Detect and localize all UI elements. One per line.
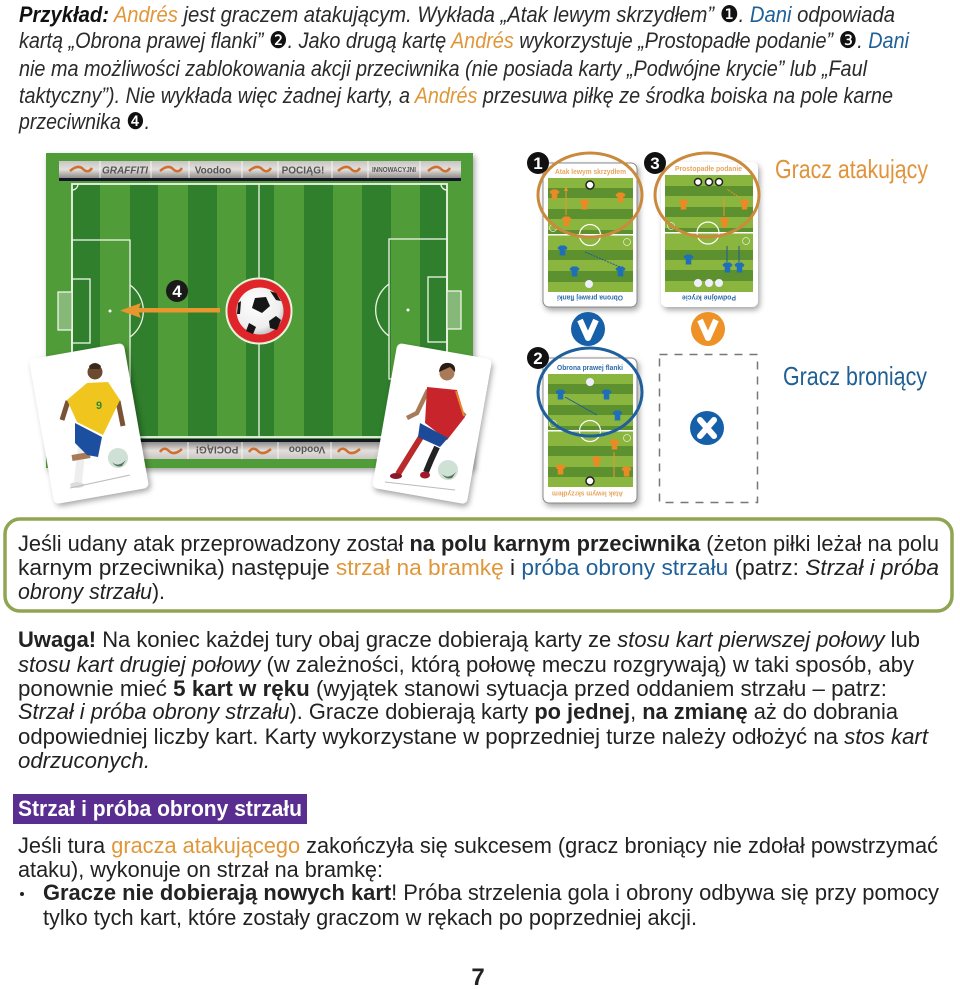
football pitch board bbox=[46, 153, 473, 468]
text block: shot rules: ataku), wykonuje on strzał na bramkę: bbox=[18, 857, 383, 882]
advertising board: top bbox=[59, 161, 461, 181]
callout: penalty area attack bbox=[5, 519, 952, 611]
ball token bbox=[226, 278, 292, 344]
icon: blue cross bbox=[690, 411, 724, 445]
text block: note: stosu kart drugiej połowy (w zależności, którą połowę meczu rozgrywają) w taki sposób, aby bbox=[18, 652, 914, 677]
text block: shot rules bbox=[18, 833, 939, 930]
advertising board: bottom: POCIĄG! bbox=[196, 444, 238, 454]
text block: note: Strzał i próba obrony strzału). Gracze dobierają karty po jednej, na zmianę aż do dobrania bbox=[18, 699, 899, 724]
text block: shot rules: tylko tych kart, które zostały graczom w rękach po poprzedniej akcji. bbox=[43, 905, 697, 930]
card 3: through pass: Podwójne krycie bbox=[682, 294, 736, 302]
text block: note bbox=[18, 627, 929, 773]
heading: shot and save attempt: Strzał i próba obrony strzału bbox=[18, 796, 302, 821]
badge: 4: 4 bbox=[172, 282, 182, 301]
player card: Andrés bbox=[29, 343, 149, 504]
highlight ring: card 1 bbox=[538, 153, 642, 237]
text block: example intro: przeciwnika ❹. bbox=[18, 109, 150, 135]
text block: example intro: Przykład: Andrés jest graczem atakującym. Wykłada „Atak lewym skrzydłem” ❶. Dani odpowiada bbox=[19, 2, 895, 28]
card 3: through pass bbox=[661, 162, 758, 307]
label: attacking player: Gracz atakujący bbox=[775, 154, 928, 184]
callout: penalty area attack: Jeśli udany atak przeprowadzony został na polu karnym przeciwnika (żeton piłki leżał na polu bbox=[18, 531, 939, 556]
text block: note: odpowiedniej liczby kart. Karty wykorzystane w poprzedniej turze należy odłożyć na stos kart bbox=[18, 724, 929, 749]
card 2: defence bbox=[543, 358, 637, 503]
badge: 2 bbox=[527, 347, 549, 369]
highlight ring: card 3 bbox=[655, 153, 759, 237]
badge: 3 bbox=[644, 152, 666, 174]
text block: note: ponownie mieć 5 kart w ręku (wyjątek stanowi sytuacja przed oddaniem strzału – patrz: bbox=[18, 676, 887, 701]
card 1: attack: Obrona prawej flanki bbox=[557, 294, 623, 302]
text block: example intro: nie ma możliwości zablokowania akcji przeciwnika (nie posiada karty „Podwójne krycie” lub „Faul bbox=[19, 56, 868, 81]
advertising board: top: GRAFFITI bbox=[102, 166, 148, 176]
text block: example intro bbox=[18, 2, 910, 135]
empty card slot bbox=[660, 354, 758, 502]
card 2: defence: Atak lewym skrzydłem bbox=[552, 490, 623, 498]
text block: shot rules: Jeśli tura gracza atakującego zakończyła się sukcesem (gracz broniący nie zdołał powstrzymać bbox=[18, 833, 938, 858]
text block: note: odrzuconych. bbox=[18, 748, 150, 773]
card 3: through pass: Prostopadłe podanie bbox=[675, 164, 742, 173]
advertising board: top: Voodoo bbox=[195, 166, 231, 176]
player card: Dani bbox=[372, 343, 492, 504]
icon: blue check mark bbox=[571, 312, 605, 346]
badge: 3: 3 bbox=[650, 154, 660, 173]
card 1: attack bbox=[543, 163, 637, 307]
icon: orange check mark bbox=[691, 312, 725, 346]
callout: penalty area attack: obrony strzału). bbox=[18, 579, 165, 604]
player figure: yellow shirt bbox=[62, 363, 130, 488]
text block: example intro: kartą „Obrona prawej flanki” ❷. Jako drugą kartę Andrés wykorzystuje „Prostopadłe podanie” ❸. Dani bbox=[19, 28, 910, 54]
badge: 1 bbox=[527, 152, 549, 174]
card 2: defence: Obrona prawej flanki bbox=[557, 363, 623, 372]
label: defending player: Gracz broniący bbox=[783, 361, 927, 391]
highlight ring: card 2 bbox=[538, 348, 642, 436]
badge: 4 bbox=[166, 280, 188, 302]
advertising board: bottom bbox=[59, 439, 461, 459]
advertising board: top: INNOWACYJNI bbox=[372, 167, 416, 174]
badge: 2: 2 bbox=[533, 349, 543, 368]
card 1: attack: Atak lewym skrzydłem bbox=[555, 167, 626, 176]
player figure: yellow shirt: 9 bbox=[96, 400, 102, 412]
text block: note: Uwaga! Na koniec każdej tury obaj gracze dobierają karty ze stosu kart pierwszej połowy lub bbox=[18, 627, 920, 652]
badge: 1: 1 bbox=[533, 154, 543, 173]
text block: example intro: taktyczny”). Nie wykłada więc żadnej karty, a Andrés przesuwa piłkę ze środka boiska na pole karne bbox=[19, 83, 893, 108]
advertising board: bottom: Voodoo bbox=[289, 444, 325, 454]
player figure: red shirt bbox=[385, 363, 465, 490]
arrow: ball movement to penalty area bbox=[120, 303, 220, 318]
callout: penalty area attack: karnym przeciwnika) następuje strzał na bramkę i próba obrony strzału (patrz: Strzał i próba bbox=[18, 555, 939, 580]
advertising board: top: POCIĄG! bbox=[282, 166, 324, 176]
text block: shot rules: Gracze nie dobierają nowych kart! Próba strzelenia gola i obrony odbywa się przy pomocy bbox=[43, 880, 939, 905]
